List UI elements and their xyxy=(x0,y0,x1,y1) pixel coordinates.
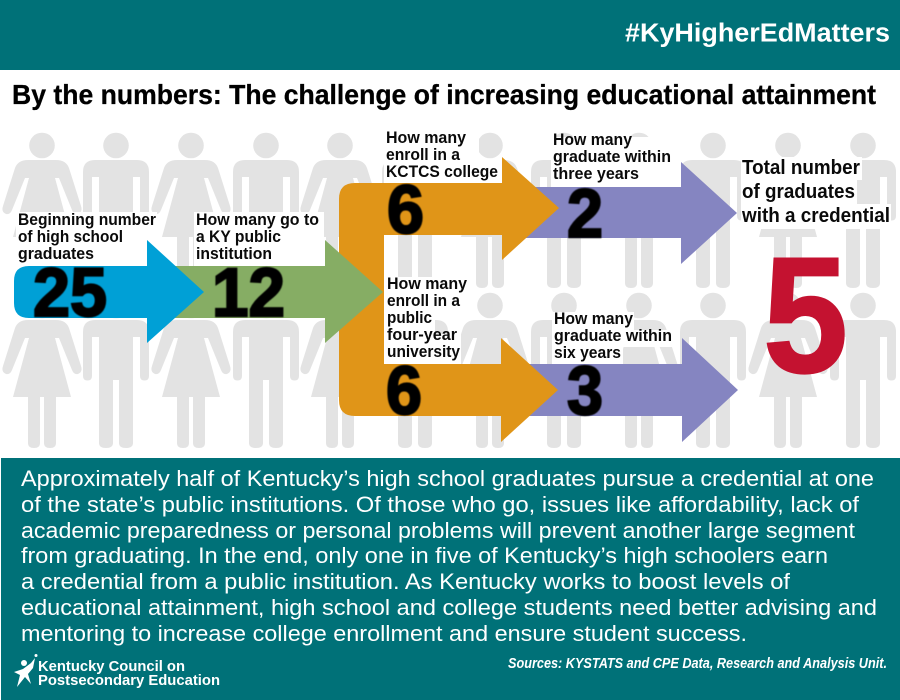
label: four-year xyxy=(387,326,458,344)
number 25: 25 xyxy=(33,254,107,331)
stage: enroll in a public four-year university xyxy=(386,275,468,429)
label: How many xyxy=(387,275,468,293)
label xyxy=(553,131,671,183)
label xyxy=(741,157,890,227)
arrow: graduate within three years xyxy=(525,162,737,264)
label: enroll in a xyxy=(387,292,461,310)
stage: graduate within three years xyxy=(553,131,671,252)
label: of high school xyxy=(18,228,123,246)
body paragraph: mentoring to increase college enrollment and ensure student success. xyxy=(21,621,747,646)
label xyxy=(554,310,672,362)
label xyxy=(18,211,157,263)
label: with a credential xyxy=(741,205,890,227)
logo text: Postsecondary Education xyxy=(38,673,220,689)
label: of graduates xyxy=(742,181,855,203)
label: graduates xyxy=(18,245,94,263)
background people pictogram xyxy=(2,133,896,448)
number 2: 2 xyxy=(567,175,603,252)
arrow: graduate within six years xyxy=(525,338,738,442)
label xyxy=(386,129,498,181)
label xyxy=(387,275,468,361)
number 12: 12 xyxy=(212,254,285,331)
stage: beginning number of high school graduates xyxy=(18,211,157,331)
logo: Kentucky Council on Postsecondary Education xyxy=(14,654,220,689)
body paragraph: Approximately half of Kentucky’s high school graduates pursue a credential at one xyxy=(21,466,874,491)
logo text: Kentucky Council on xyxy=(38,659,185,675)
stage: graduate within six years xyxy=(554,310,672,429)
icon: star person xyxy=(14,654,38,687)
total graduates with a credential xyxy=(741,157,890,407)
body paragraph: educational attainment, high school and college students need better advising and xyxy=(21,595,877,620)
body paragraph: of the state’s public institutions. Of those who go, issues like affordability, lack of xyxy=(21,492,860,517)
label: public xyxy=(387,309,432,327)
number 5: 5 xyxy=(763,223,848,407)
label: How many xyxy=(386,129,467,147)
number 6: 6 xyxy=(387,171,424,248)
label: six years xyxy=(554,344,621,362)
arrow: KY public institution xyxy=(170,240,383,343)
logo text xyxy=(38,659,220,689)
label: KCTCS college xyxy=(386,163,498,181)
label: graduate within xyxy=(553,148,671,166)
label: three years xyxy=(553,165,639,183)
number 6: 6 xyxy=(386,352,422,429)
body paragraph: a credential from a public institution. As Kentucky works to boost levels of xyxy=(21,569,791,594)
label: How many xyxy=(553,131,633,149)
label: Total number xyxy=(742,157,860,179)
header band xyxy=(0,0,900,70)
stage: enroll in a KCTCS college xyxy=(386,129,498,248)
arrow: high school graduates xyxy=(14,240,204,343)
label: How many xyxy=(554,310,634,328)
stage: go to a KY public institution xyxy=(196,211,319,331)
body paragraph: academic preparedness or personal problems will prevent another large segment xyxy=(21,518,855,543)
body paragraph xyxy=(21,466,877,646)
label xyxy=(196,211,319,263)
label: institution xyxy=(196,245,272,263)
number 3: 3 xyxy=(567,352,603,429)
label: a KY public xyxy=(196,228,281,246)
label backgrounds xyxy=(16,129,891,364)
hashtag: #KyHigherEdMatters xyxy=(625,20,890,48)
label: university xyxy=(387,343,461,361)
label: enroll in a xyxy=(386,146,461,164)
label: How many go to xyxy=(196,211,319,229)
label: graduate within xyxy=(554,327,672,345)
footer panel xyxy=(1,458,900,700)
arrow: orange branch to KCTCS and four-year university xyxy=(339,157,559,442)
title: By the numbers: The challenge of increasing educational attainment xyxy=(12,79,876,110)
body paragraph: from graduating. In the end, only one in five of Kentucky’s high schoolers earn xyxy=(21,543,828,568)
label: Beginning number xyxy=(18,211,157,229)
